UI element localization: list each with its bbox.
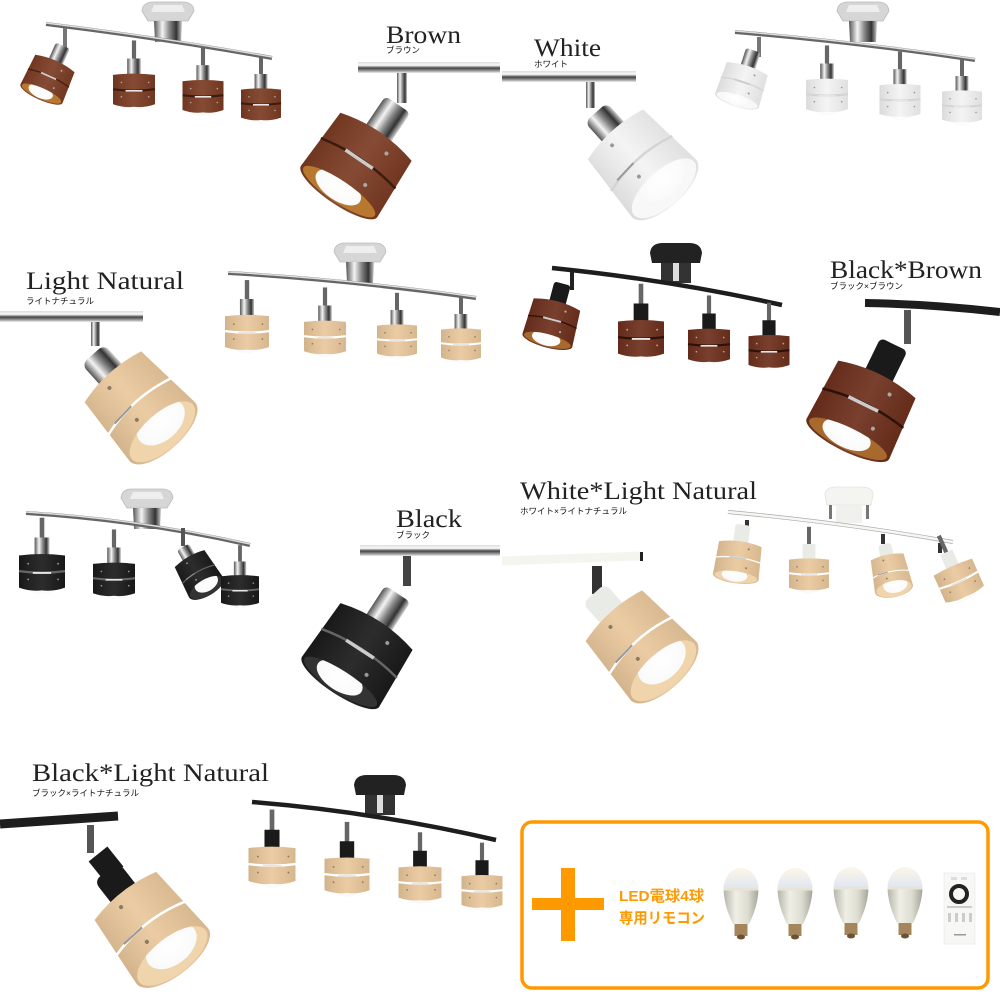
lamp 2 <box>789 527 829 593</box>
icon: LED bulb 3 <box>834 867 868 938</box>
stem <box>592 566 602 594</box>
lamp 3 <box>688 295 730 365</box>
icon: LED bulb 1 <box>724 868 758 940</box>
title: Black <box>396 506 463 533</box>
bar <box>252 802 496 840</box>
lamp 3 <box>182 48 224 116</box>
bar <box>358 62 500 73</box>
lamp shade <box>294 79 436 228</box>
katakana label: ブラック×ライトナチュラル <box>32 788 139 798</box>
panel: White four-lamp fixture <box>713 2 982 125</box>
lamp 3 <box>865 534 915 601</box>
bar <box>735 31 975 60</box>
panel: Black and Light Natural four-lamp fixture <box>248 775 502 911</box>
lamp 4 <box>221 545 259 608</box>
title: White*Light Natural <box>520 478 757 505</box>
lamp 3 <box>880 52 920 120</box>
stem <box>87 825 94 853</box>
bar <box>26 512 250 545</box>
lamp 1 <box>248 810 296 888</box>
stem <box>397 73 407 103</box>
lamp 2 <box>304 287 346 357</box>
lamp 2 <box>618 284 664 360</box>
title: Black*Brown <box>830 257 983 284</box>
panel: LED bulbs and remote bundle <box>522 822 988 988</box>
bundle label <box>619 888 705 927</box>
lamp 4 <box>920 527 986 608</box>
panel: Black and Brown close-up <box>801 257 1000 471</box>
canopy <box>650 243 702 283</box>
icon: LED bulb 2 <box>778 868 812 940</box>
socket extension <box>98 854 114 874</box>
icon: LED bulb 4 <box>888 867 922 938</box>
icon: plus sign <box>532 868 604 941</box>
title: Brown <box>386 22 462 49</box>
panel: White and Light Natural four-lamp fixture <box>712 487 986 608</box>
lamp shade <box>561 564 709 714</box>
lamp 4 <box>942 59 982 125</box>
lamp 4 <box>748 303 790 371</box>
lamp 1 <box>713 37 775 114</box>
lamp 4 <box>462 843 502 911</box>
lamp 2 <box>324 822 370 897</box>
lamp 4 <box>241 57 281 123</box>
canopy <box>825 487 873 523</box>
bar <box>502 552 643 561</box>
panel: Black and Light Natural close-up <box>0 760 269 999</box>
bar <box>865 303 1000 312</box>
title: Light Natural <box>26 268 184 295</box>
bar <box>0 816 118 824</box>
canopy <box>354 775 406 815</box>
lamp 1 <box>19 518 65 594</box>
lamp 2 <box>113 40 155 110</box>
lamp shade <box>295 569 436 718</box>
bar <box>0 311 143 322</box>
bar <box>728 512 953 542</box>
bar <box>552 268 782 305</box>
panel: White close-up <box>502 35 708 231</box>
lamp shade <box>71 844 220 999</box>
canopy <box>142 2 194 42</box>
canopy <box>334 243 386 283</box>
katakana label: ライトナチュラル <box>26 296 95 306</box>
katakana label: ホワイト×ライトナチュラル <box>520 506 627 516</box>
katakana label: ブラック <box>396 530 430 540</box>
panel: White and Light Natural close-up <box>502 478 757 714</box>
lamp 1 <box>225 280 269 353</box>
lamp 1 <box>712 520 766 586</box>
panel: Light Natural four-lamp fixture <box>225 243 481 363</box>
panel: Black close-up <box>295 506 500 718</box>
lamp shade <box>60 325 208 475</box>
canopy <box>121 489 173 529</box>
bar <box>46 23 272 58</box>
orange frame <box>522 822 988 988</box>
lamp 3 <box>166 528 228 605</box>
lamp 2 <box>93 529 135 599</box>
stem <box>586 82 595 108</box>
lamp 3 <box>398 832 442 904</box>
icon: remote control <box>944 873 975 944</box>
stem <box>403 556 411 586</box>
panel: Brown four-lamp fixture <box>18 2 281 123</box>
lamp 3 <box>377 293 417 359</box>
katakana label: ブラック×ブラウン <box>830 281 903 291</box>
lamp 2 <box>806 45 848 115</box>
canopy <box>837 2 889 42</box>
title: Black*Light Natural <box>32 760 269 787</box>
lamp 1 <box>18 28 84 109</box>
panel: Black and Brown four-lamp fixture <box>521 243 790 371</box>
lamp 4 <box>441 297 481 363</box>
panel: Brown close-up <box>294 22 500 228</box>
panel: Black four-lamp fixture <box>19 489 259 608</box>
katakana label: ホワイト <box>534 59 568 69</box>
bar <box>502 71 636 82</box>
katakana label: ブラウン <box>386 45 420 55</box>
stem <box>904 310 911 344</box>
lamp shade <box>564 84 708 231</box>
bundle label: 専用リモコン <box>619 909 705 927</box>
stem <box>91 322 100 346</box>
lamp 1 <box>521 272 587 354</box>
panel: Light Natural close-up <box>0 268 208 475</box>
bar <box>360 545 500 556</box>
bar <box>228 272 476 298</box>
bundle label: LED電球4球 <box>619 888 704 905</box>
title: White <box>534 35 601 62</box>
lamp shade <box>801 324 935 471</box>
